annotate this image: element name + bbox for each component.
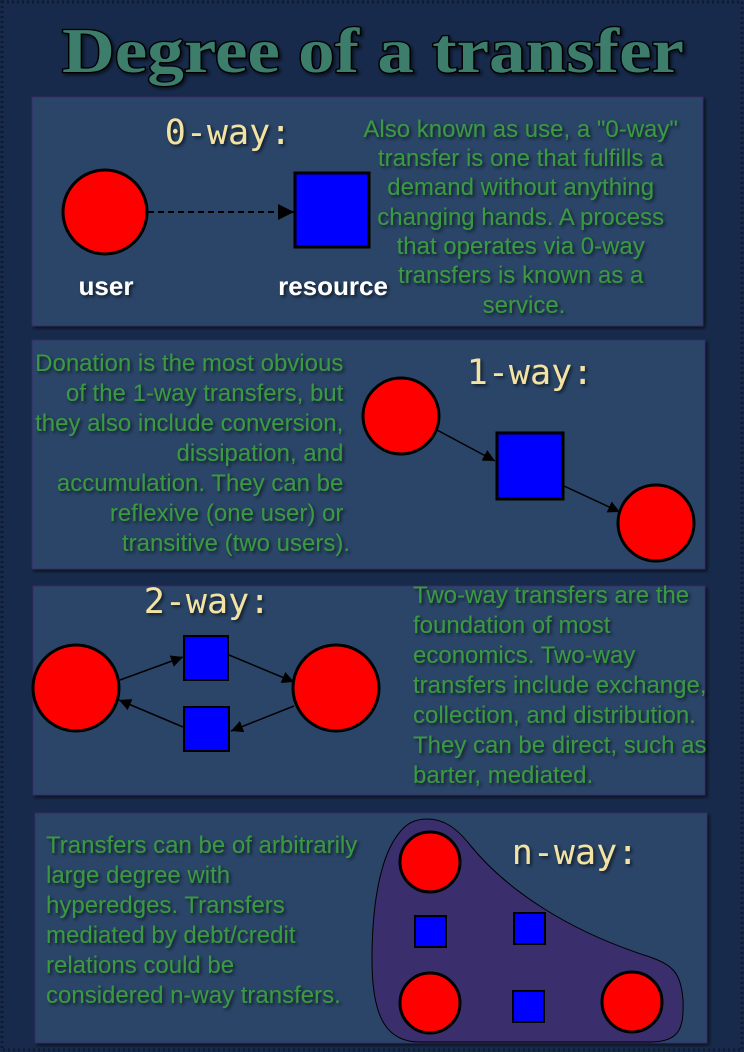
text block: 0-way description: Also known as use, a "0-way" <box>363 116 678 143</box>
text block: 0-way description: transfer is one that fulfills a <box>378 145 664 172</box>
text block: 0-way description: service. <box>483 292 565 319</box>
text block: 1-way description: dissipation, and <box>177 440 343 467</box>
diagram: hyperedge <box>372 819 683 1042</box>
text block: 2-way description: collection, and distribution. <box>413 702 696 729</box>
text block: 1-way description: accumulation. They can be <box>57 470 343 497</box>
text block: n-way description: Transfers can be of arbitrarily <box>46 832 357 859</box>
text block: 2-way description: barter, mediated. <box>413 762 593 789</box>
text block: n-way description: large degree with <box>46 862 230 889</box>
icon: resource square <box>295 173 369 247</box>
text block: 0-way description: transfers is known as a <box>398 262 644 289</box>
panel: n-way <box>35 813 707 1043</box>
text block: 0-way description: changing hands. A process <box>377 204 664 231</box>
heading: 1-way: 1-way: <box>467 353 593 393</box>
text block: 1-way description: transitive (two users). <box>122 530 350 557</box>
panel: 1-way <box>32 340 705 569</box>
text block: n-way description: considered n-way transfers. <box>46 982 341 1009</box>
heading: 2-way: 2-way: <box>144 582 270 622</box>
label: resource: resource <box>278 271 388 301</box>
text block: n-way description: mediated by debt/credit <box>46 922 296 949</box>
text block: 1-way description: reflexive (one user) or <box>110 500 343 527</box>
heading: 0-way: 0-way: <box>165 113 291 153</box>
text block: n-way description: hyperedges. Transfers <box>46 892 285 919</box>
panel: 2-way <box>33 582 713 795</box>
text block: 2-way description: They can be direct, such as <box>413 732 706 759</box>
diagram: 1-way <box>363 378 694 561</box>
text block: 0-way description: demand without anything <box>387 174 654 201</box>
text block: 1-way description: of the 1-way transfers, but <box>66 380 344 407</box>
text block: 2-way description: Two-way transfers are the <box>413 582 689 609</box>
text block: n-way description: relations could be <box>46 952 234 979</box>
arrow: dashed <box>148 211 294 213</box>
text block: 2-way description: foundation of most <box>413 612 611 639</box>
title: Degree of a transfer <box>62 15 684 86</box>
icon: user circle <box>63 170 147 254</box>
text block: 0-way description: that operates via 0-way <box>397 233 645 260</box>
text block: 1-way description: Donation is the most obvious <box>35 350 343 377</box>
panel: 0-way <box>32 97 703 326</box>
text block: 1-way description: they also include conversion, <box>35 410 343 437</box>
heading: n-way: n-way: <box>512 833 638 873</box>
diagram: 2-way <box>33 636 379 751</box>
text block: 2-way description: transfers include exchange, <box>413 672 707 699</box>
text block: 2-way description: economics. Two-way <box>413 642 635 669</box>
label: user: user <box>79 271 133 301</box>
